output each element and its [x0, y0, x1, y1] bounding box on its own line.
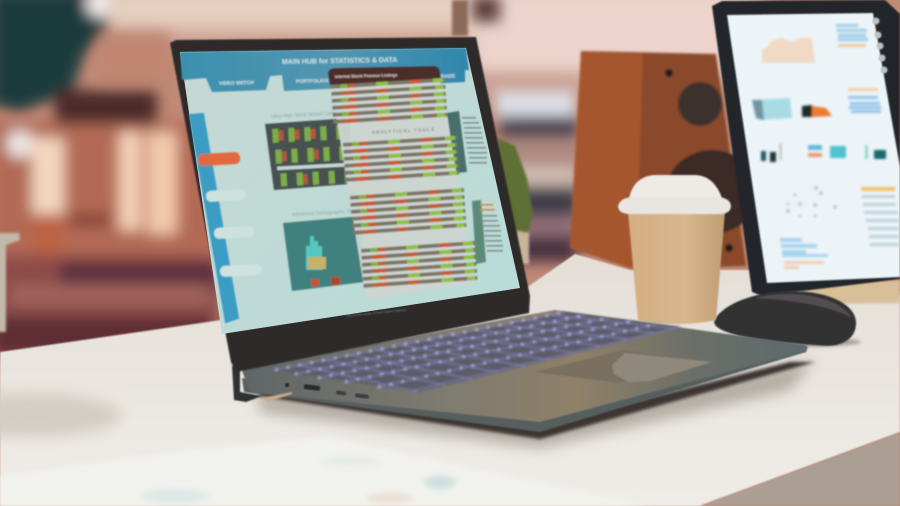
- port: audio jack: [285, 383, 289, 387]
- desk smudge reflection: [0, 393, 122, 437]
- desk front edge: [700, 433, 900, 506]
- overlay body: [330, 70, 476, 299]
- window frame: [452, 0, 468, 36]
- sidebar button: green text: [220, 264, 262, 277]
- sidebar button: white one: [206, 189, 246, 202]
- screen footer caption: Index of the volume of Stock Market Statistics: [346, 308, 407, 318]
- right side description top: [462, 117, 487, 164]
- potted plant: [498, 138, 533, 264]
- left sidebar strip: [190, 114, 238, 322]
- laptop base: [232, 310, 808, 432]
- screen content: [180, 48, 503, 322]
- stock listings overlay panel: [328, 66, 477, 299]
- dark market panel: [265, 118, 350, 190]
- cup lid rim: [618, 197, 731, 214]
- listing rows group three: [350, 188, 466, 235]
- mouse body: [714, 291, 856, 346]
- mouse shadow: [729, 337, 861, 347]
- teal chart panel: [283, 216, 364, 291]
- listing rows group two: [343, 136, 459, 182]
- tab label: portfolios: PORTFOLIOS: [296, 78, 329, 85]
- tablet side icons: [872, 18, 888, 74]
- right teal panel: [447, 111, 467, 173]
- mouse top highlight: [755, 294, 852, 318]
- screen background: [180, 48, 520, 334]
- desk surface: [0, 254, 900, 506]
- sidebar button: orange: [198, 152, 240, 166]
- listing rows group one: [331, 78, 447, 124]
- base top deck: [241, 310, 806, 422]
- tablet scatter plot: [786, 186, 837, 218]
- small object at left edge: [0, 233, 20, 332]
- tablet 3D blocks: [752, 98, 792, 120]
- tablet lower orange header: [861, 187, 895, 191]
- tablet: [712, 0, 900, 304]
- overlay title bar: [328, 66, 441, 85]
- cup body: [628, 212, 725, 324]
- speaker woofer: [666, 150, 758, 234]
- laptop: [170, 37, 808, 432]
- listing rows group four: [361, 241, 477, 288]
- tablet lower list: [862, 195, 900, 246]
- cup lid top: [629, 175, 722, 198]
- cup reflection in touchpad: [612, 353, 712, 382]
- computer mouse: [714, 291, 861, 347]
- sidebar button: white two: [214, 226, 254, 239]
- tab label: video watch: VIDEO WATCH: [219, 80, 254, 87]
- port: usb c right: [355, 393, 369, 399]
- laptop lid bezel: [170, 37, 530, 372]
- tablet body: [712, 0, 900, 296]
- wooden speaker: [570, 51, 758, 270]
- overlay title: Internal Stock Process Listings: [335, 72, 398, 79]
- tablet small charts row: [761, 151, 766, 161]
- dashboard title: MAIN HUB for STATISTICS & DATA: [282, 57, 397, 66]
- speaker front left panel: [570, 51, 643, 270]
- plant pot: [516, 230, 529, 264]
- header band: [180, 48, 469, 92]
- rear hinge foot: [232, 365, 262, 402]
- tablet screen: [727, 13, 900, 283]
- teal chart bars: [306, 236, 340, 286]
- tablet charts: [752, 24, 900, 269]
- speaker tweeter: [678, 82, 722, 126]
- tablet right list: [848, 96, 881, 113]
- second right panel: [472, 200, 486, 264]
- tablet orange bar chart: [762, 38, 815, 63]
- plant foliage: [498, 138, 533, 233]
- market panel cells: [272, 125, 353, 187]
- keyboard: [275, 312, 682, 392]
- tablet lower bar chart: [780, 238, 828, 257]
- base underside: [242, 346, 808, 432]
- tab label: trade: TRADE: [438, 74, 456, 80]
- heading: demographic: Advanced Demographic Trends: [292, 208, 363, 218]
- laptop screen: [180, 48, 520, 334]
- tablet wooden stand: [800, 280, 900, 304]
- port: usb c left: [336, 390, 346, 396]
- laptop shadow on desk: [255, 360, 815, 448]
- speaker cabinet: [570, 51, 746, 270]
- port: usb a: [304, 384, 320, 391]
- speaker screws: [665, 69, 733, 252]
- tablet blue list: [836, 24, 868, 41]
- analytical tools banner: ANALYTICAL TOOLS: [372, 127, 435, 135]
- touchpad: [534, 350, 712, 383]
- right side description bottom: [480, 204, 503, 252]
- tan hinge strip: [262, 392, 292, 402]
- heading: stock market: Ultra High Stock Market Listings: [271, 110, 343, 120]
- coffee cup: [618, 175, 731, 324]
- paper document on desk: [0, 437, 650, 506]
